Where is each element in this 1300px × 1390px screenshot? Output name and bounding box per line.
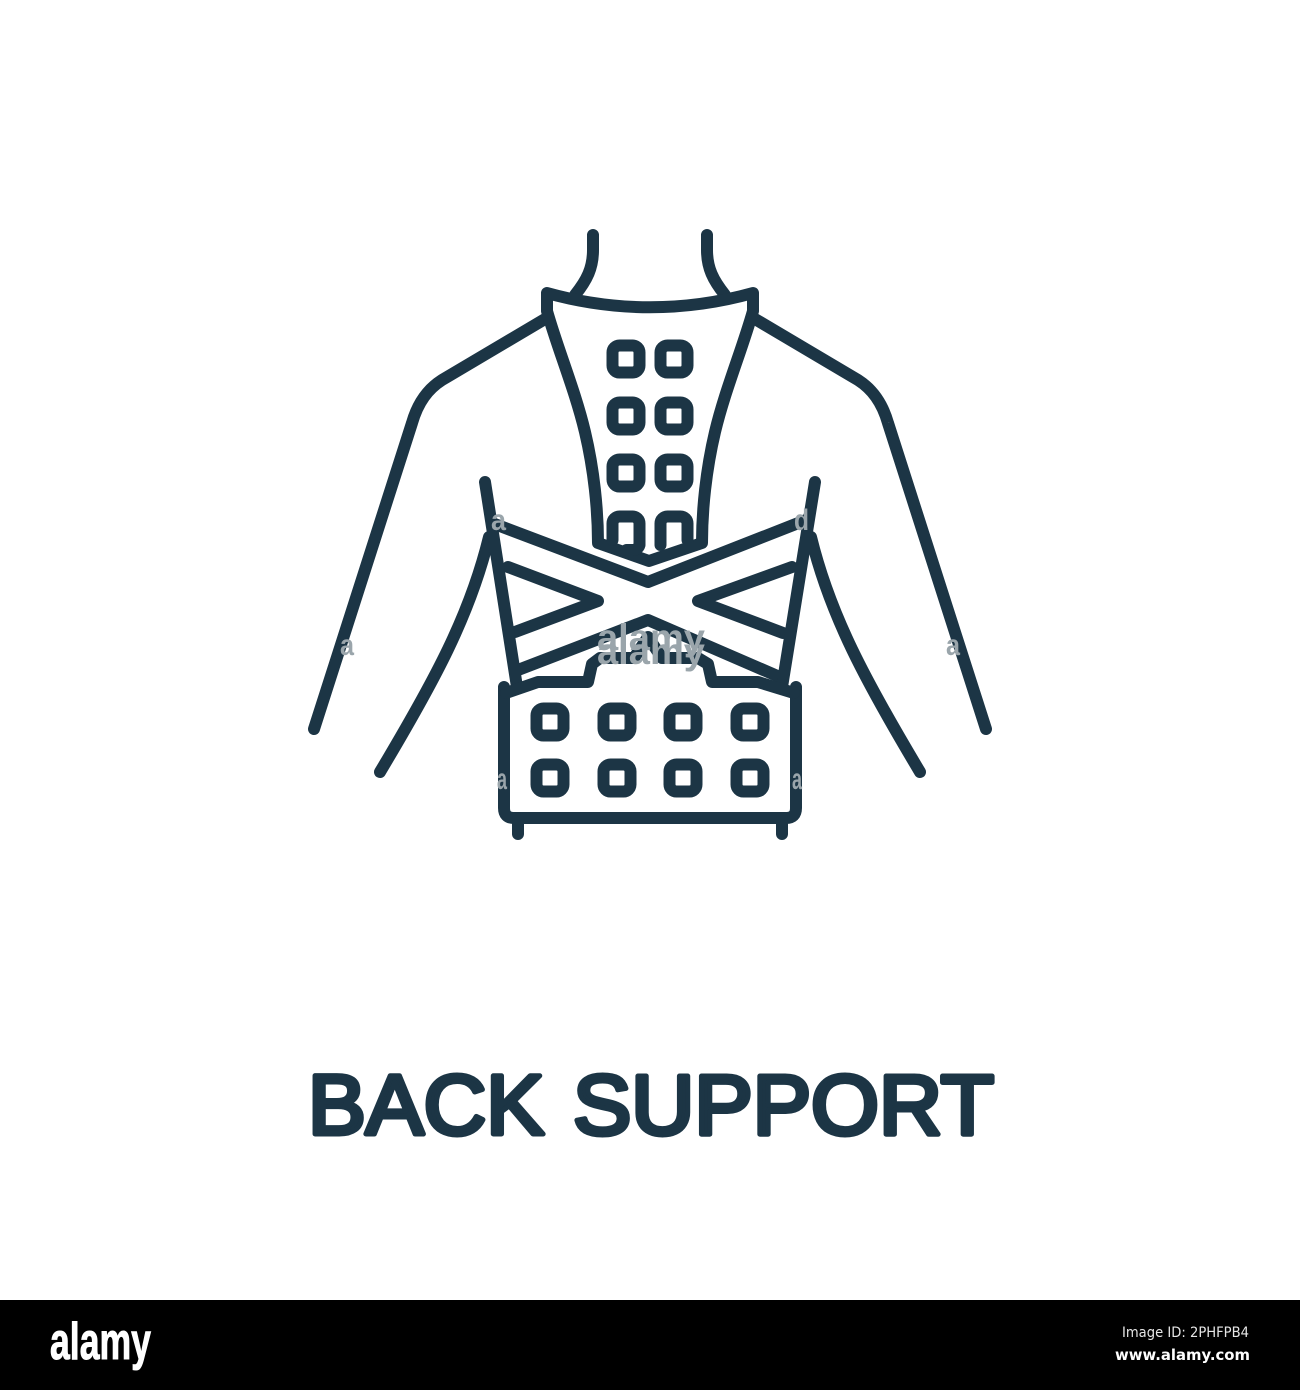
watermark: alamy marks: a xyxy=(946,629,960,662)
title: SUPPORT xyxy=(573,1058,994,1152)
watermark: alamy marks: alamy xyxy=(597,617,705,658)
icon part: shoulders and arms xyxy=(314,319,986,729)
footer image id: Image ID: 2PHFPB4 xyxy=(1122,1325,1249,1341)
watermark: alamy marks: alamy xyxy=(597,631,705,672)
watermark: alamy marks xyxy=(340,504,960,796)
watermark: alamy marks: a xyxy=(491,504,506,537)
icon part: torso sides xyxy=(380,537,920,772)
watermark: alamy marks: d xyxy=(794,504,809,537)
icon part: upper back panel xyxy=(547,293,753,561)
icon part: belt cushions xyxy=(536,708,764,792)
footer logo: alamy xyxy=(50,1313,151,1371)
icon part: crossed straps xyxy=(485,482,815,687)
title xyxy=(308,1058,994,1152)
watermark: alamy marks: a xyxy=(792,763,802,796)
footer bar xyxy=(0,1300,1300,1390)
title: BACK xyxy=(308,1058,544,1152)
icon part: neck xyxy=(575,235,725,295)
icon part: lumbar belt xyxy=(504,637,796,834)
icon part: upper panel cushions xyxy=(612,346,688,550)
footer website: www.alamy.com xyxy=(1115,1346,1250,1364)
icon: back support brace on torso xyxy=(314,235,986,834)
watermark: alamy marks: a xyxy=(497,763,507,796)
watermark: alamy marks: a xyxy=(340,629,354,662)
